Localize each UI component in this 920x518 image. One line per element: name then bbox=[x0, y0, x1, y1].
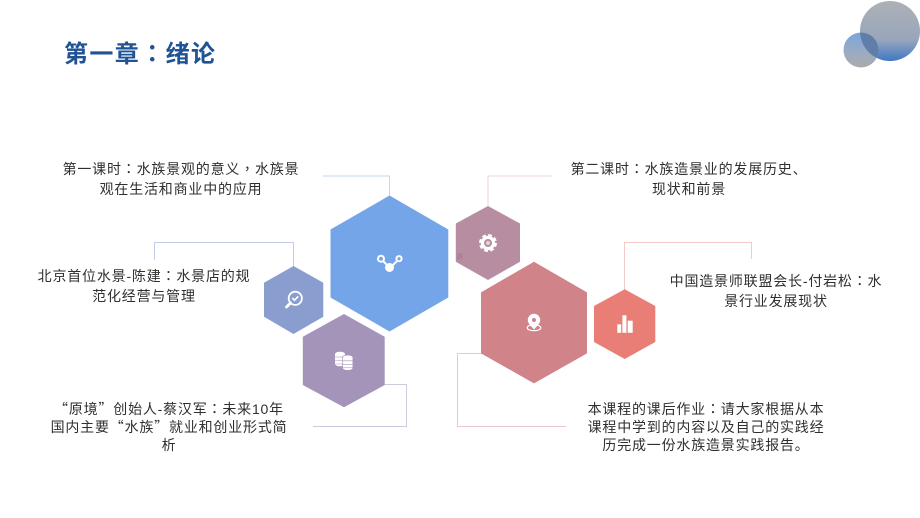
hexagon: rose with location pin icon bbox=[481, 262, 587, 383]
text: homework bbox=[588, 399, 824, 453]
text: homework: 历完成一份水族造景实践报告。 bbox=[602, 437, 810, 453]
hexagon: blue with network icon bbox=[330, 196, 448, 332]
icon: network nodes bbox=[378, 256, 402, 272]
hexagon: coral with bar chart icon bbox=[594, 289, 655, 359]
icon: magnifier with check bbox=[286, 292, 302, 307]
text: China association lecture: 中国造景师联盟会长-付岩松：水 bbox=[670, 271, 882, 291]
text: Yuanjing lecture bbox=[51, 399, 287, 453]
connector: Beijing lecture bbox=[154, 242, 294, 267]
connector: Yuanjing lecture bbox=[313, 384, 406, 426]
text: homework: 本课程的课后作业：请大家根据从本 bbox=[588, 399, 824, 419]
text: China association lecture: 景行业发展现状 bbox=[724, 292, 828, 308]
title: 第一章：绪论 bbox=[64, 34, 216, 69]
connector: lesson 1 bbox=[323, 176, 390, 196]
connector: China association lecture bbox=[624, 242, 752, 290]
text: Yuanjing lecture: 国内主要“水族”就业和创业形式简 bbox=[51, 417, 287, 437]
text: lesson 1: 第一课时：水族景观的意义，水族景 bbox=[63, 159, 299, 179]
icon: location pin bbox=[527, 314, 541, 331]
text: Yuanjing lecture: “原境”创始人-蔡汉军：未来10年 bbox=[54, 399, 284, 419]
text: lesson 2: 第二课时：水族造景业的发展历史、 bbox=[571, 159, 807, 179]
text: Yuanjing lecture: 析 bbox=[162, 437, 176, 453]
text: homework: 课程中学到的内容以及自己的实践经 bbox=[588, 419, 824, 435]
text: Beijing lecture: 范化经营与管理 bbox=[92, 288, 196, 304]
hexagon: periwinkle with search icon bbox=[264, 266, 323, 334]
text: Beijing lecture: 北京首位水景-陈建：水景店的规 bbox=[38, 266, 250, 286]
text: lesson 2 bbox=[571, 159, 807, 196]
text: lesson 1 bbox=[63, 159, 299, 196]
text: lesson 2: 现状和前景 bbox=[652, 180, 726, 196]
hexagon: mauve with gear icon bbox=[456, 206, 520, 280]
connector: lesson 2 bbox=[488, 176, 552, 207]
icon: bar chart bbox=[617, 315, 633, 333]
hexagon: purple with coins icon bbox=[303, 314, 385, 407]
icon: gear bbox=[480, 235, 496, 251]
text: China association lecture bbox=[670, 271, 882, 308]
text: lesson 1: 观在生活和商业中的应用 bbox=[100, 180, 262, 196]
text: Beijing lecture bbox=[38, 266, 250, 304]
connector: homework bbox=[458, 354, 566, 426]
icon: coins bbox=[335, 352, 353, 370]
decorative circles bbox=[844, 1, 920, 68]
